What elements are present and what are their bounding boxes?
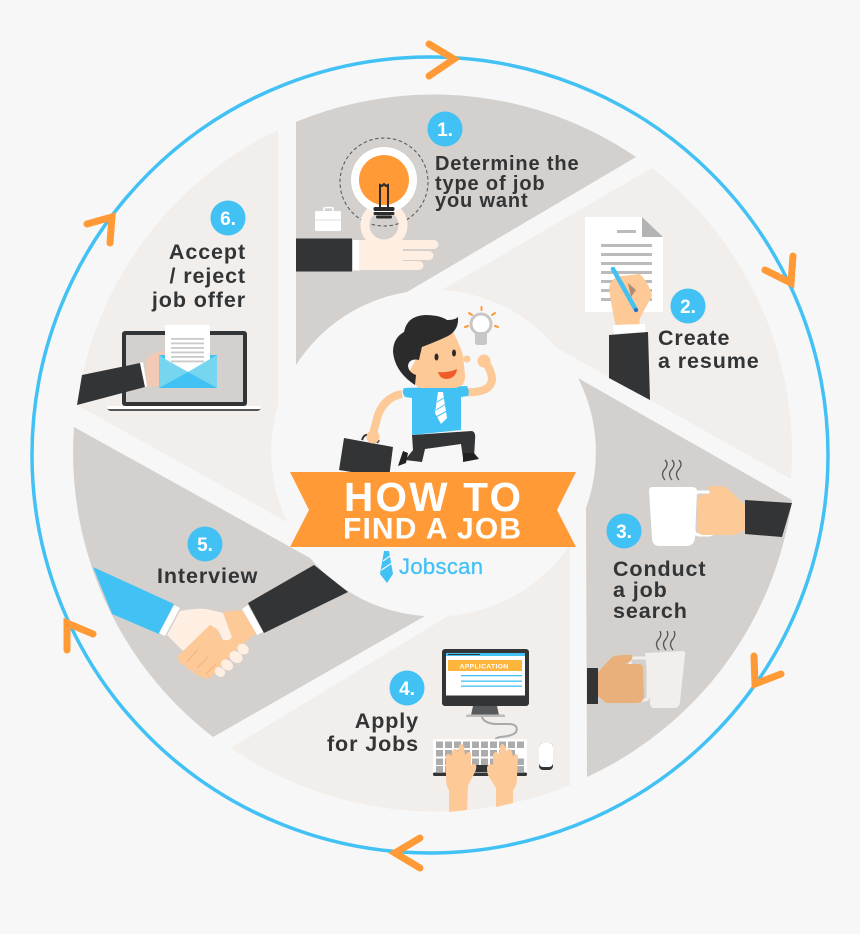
- badge 6: 6.: [220, 209, 236, 230]
- text: accept / reject job offer: Accept: [169, 240, 246, 264]
- panel 6 background: [77, 130, 287, 522]
- text: apply for jobs: Apply: [355, 709, 419, 733]
- panel 5 background: [73, 427, 425, 737]
- icon: document: [585, 217, 663, 312]
- icon: computer monitor with application: APPLICATION: [460, 664, 508, 670]
- icon: grey mug held in hand: [587, 631, 685, 708]
- text: conduct a job search: search: [613, 599, 688, 623]
- text: conduct a job search: Conduct: [613, 557, 706, 581]
- text: accept / reject job offer: job offer: [151, 288, 246, 312]
- icon: computer monitor with application: [442, 649, 529, 741]
- icon: small idea bulb: [465, 307, 498, 345]
- step 6: accept or reject job offer: [77, 200, 261, 411]
- badge 3: 3.: [616, 522, 632, 543]
- text: interview: Interview: [157, 564, 258, 588]
- step 5: interview: [93, 526, 348, 679]
- badge 6: [210, 200, 246, 236]
- badge 4: [390, 670, 424, 706]
- icon: light bulb held in hand: [296, 138, 438, 272]
- text: create a resume: Create: [658, 326, 730, 350]
- text: determine the type of job you want: you want: [435, 190, 528, 212]
- badge 1: [428, 112, 462, 146]
- icon: keyboard, mouse and typing hands: [433, 739, 553, 812]
- jobscan logo: [380, 551, 483, 583]
- text: create a resume: a resume: [658, 349, 760, 373]
- badge 1: 1.: [437, 120, 453, 141]
- center character: running man with briefcase: [339, 307, 498, 478]
- icon: hand with pencil: [609, 269, 652, 400]
- icon: white mug held in hand: [649, 460, 792, 546]
- title: how to: HOW TO: [344, 474, 521, 520]
- step 3: conduct a job search: [587, 460, 792, 708]
- step 2: create a resume: [585, 217, 760, 400]
- text: accept / reject job offer: / reject: [169, 264, 246, 288]
- title banner: [290, 472, 576, 547]
- badge 3: [606, 514, 642, 548]
- icon: handshake: [93, 565, 348, 679]
- text: determine the type of job you want: Determine the: [435, 153, 579, 175]
- panel 1 background: [296, 95, 636, 365]
- badge 5: [188, 526, 222, 562]
- panel 3 background: [578, 378, 792, 777]
- panel 2 background: [442, 168, 792, 479]
- step 1: determine the type of job: [296, 112, 579, 272]
- badge 5: 5.: [197, 535, 213, 556]
- panel 4 background: [231, 545, 570, 811]
- icon: laptop with envelope: [77, 325, 261, 411]
- text: determine the type of job you want: type of job: [435, 173, 545, 195]
- step 4: apply for jobs: [327, 649, 553, 812]
- badge 2: [670, 288, 706, 324]
- text: conduct a job search: a job: [613, 578, 668, 602]
- text: apply for jobs: for Jobs: [327, 732, 419, 756]
- badge 2: 2.: [680, 297, 696, 318]
- title: find a job: FIND A JOB: [343, 512, 521, 546]
- icon: small briefcase: [315, 208, 341, 231]
- jobscan logo: Jobscan: [399, 554, 483, 579]
- badge 4: 4.: [399, 679, 415, 700]
